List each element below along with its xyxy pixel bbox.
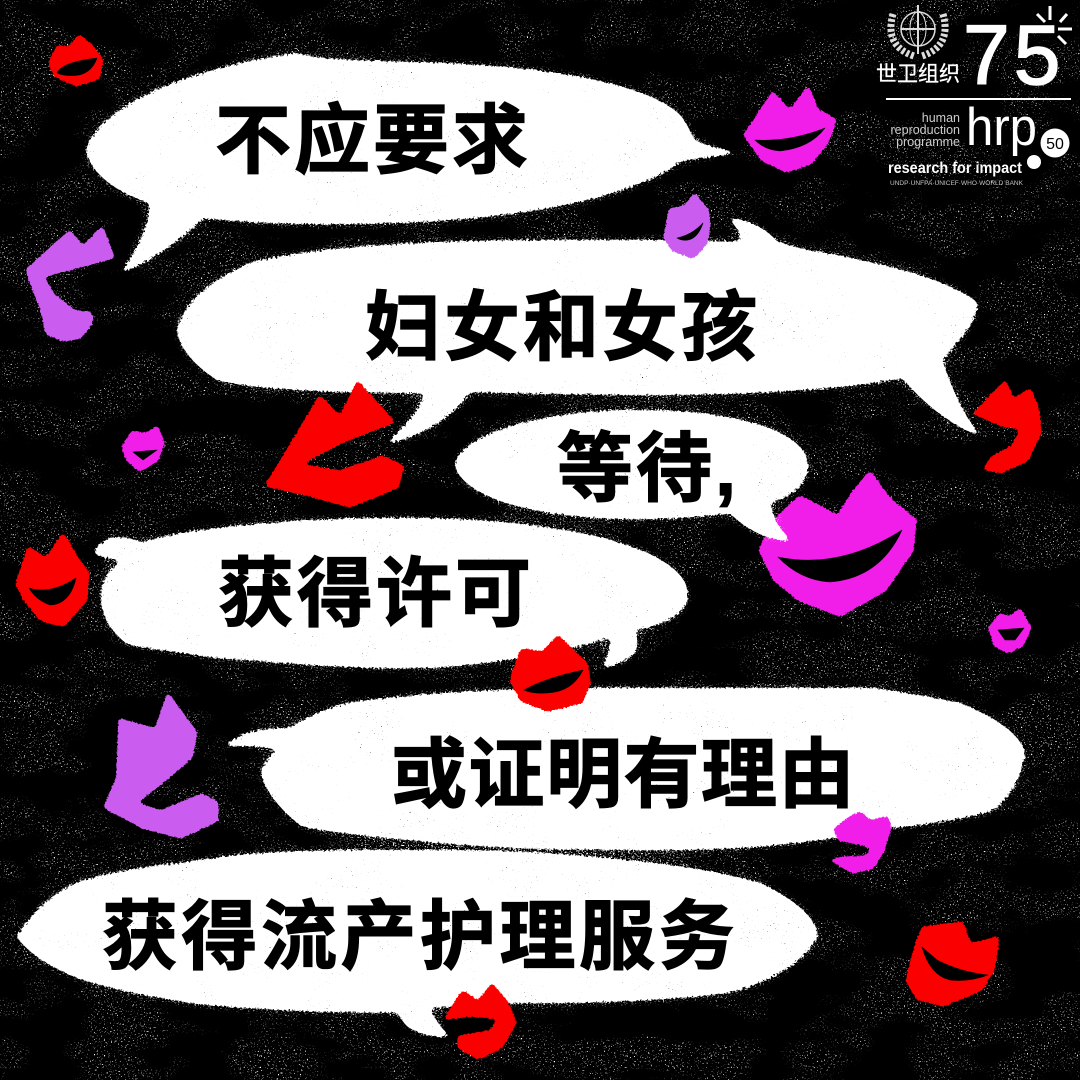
lips: red left — [17, 535, 88, 625]
headline text lines — [102, 99, 856, 980]
lips: small purple top — [665, 195, 709, 257]
line 5: 或证明有理由 — [391, 733, 856, 818]
bubble 1 — [86, 53, 742, 274]
lips: red right profile — [975, 382, 1040, 472]
lips: small magenta right — [990, 610, 1030, 652]
line 3: 等待, — [557, 427, 739, 512]
HRP full name — [890, 111, 960, 149]
bubble 5 — [222, 688, 1025, 850]
anniversary number: 75 — [963, 8, 1064, 102]
line 6: 获得流产护理服务 — [102, 895, 738, 980]
lips: red bottom right — [907, 923, 998, 1005]
line 2: 妇女和女孩 — [365, 286, 760, 371]
partners: UNDP·UNFPA·UNICEF·WHO·WORLD BANK — [890, 180, 1024, 187]
logo block: WHO 75 and HRP — [876, 5, 1072, 187]
lips: red bottom — [446, 985, 515, 1058]
lips: red centre — [511, 637, 589, 710]
icon: sun rays — [1037, 6, 1072, 44]
WHO name: 世卫组织 — [876, 63, 960, 86]
bubble 6 — [17, 850, 818, 1037]
tagline: research for impact — [888, 160, 1022, 177]
line 1: 不应要求 — [215, 99, 531, 184]
line 4: 获得许可 — [218, 552, 534, 637]
HRP full name: human — [922, 111, 960, 125]
bubble 4 — [93, 518, 688, 668]
HRP full name: programme — [896, 135, 960, 149]
bubble 3 — [455, 410, 808, 542]
HRP wordmark: hrp — [966, 98, 1037, 157]
HRP full name: reproduction — [890, 123, 960, 137]
lips: magenta lower right — [832, 813, 890, 872]
lips: purple large profile — [105, 695, 217, 837]
lips: red top left — [50, 36, 102, 85]
divider — [886, 98, 1071, 100]
bubble 2 — [177, 217, 982, 445]
lips: small magenta left — [123, 427, 163, 470]
HRP 50 badge — [1027, 128, 1070, 169]
lips: purple left profile — [27, 228, 113, 340]
lips: red large profile — [267, 383, 403, 506]
lips: large magenta — [760, 473, 915, 615]
lips: magenta top right — [745, 88, 835, 171]
icon: WHO emblem — [891, 5, 945, 56]
HRP 50 badge: 50 — [1046, 136, 1064, 153]
